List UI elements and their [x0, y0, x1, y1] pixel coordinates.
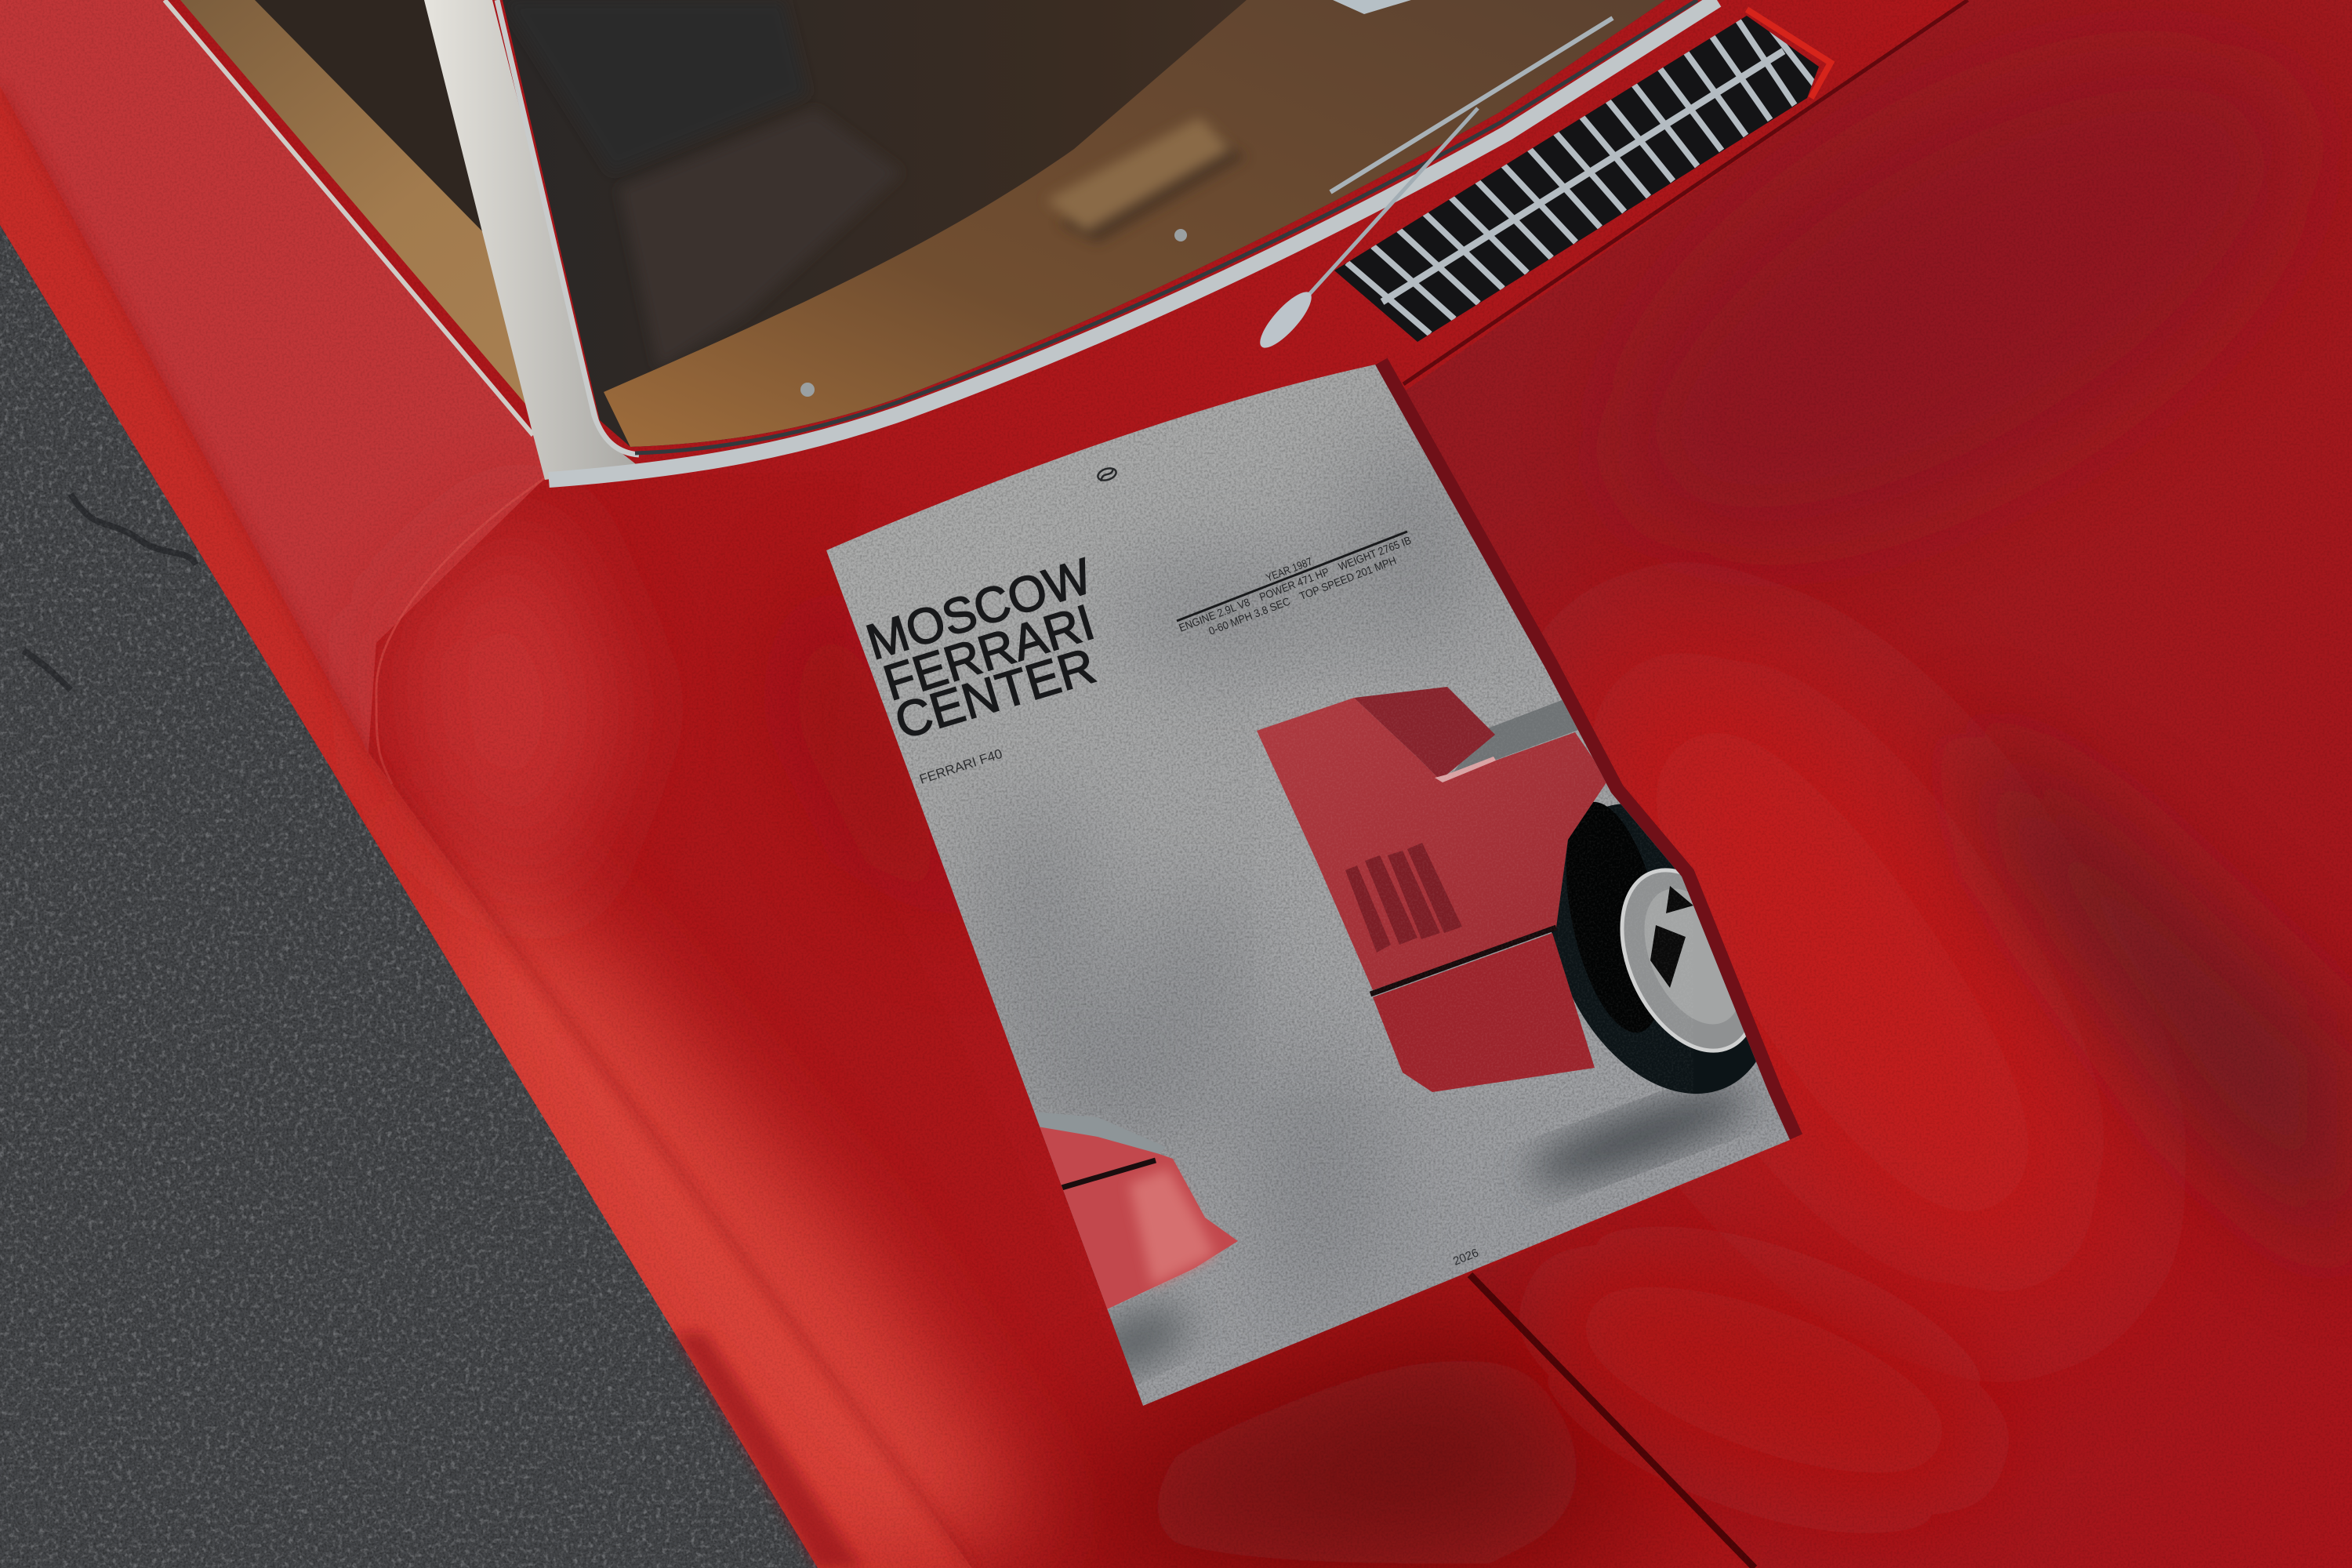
wiper	[1253, 18, 1613, 354]
dark fender edge at road	[674, 1333, 862, 1568]
car wheel shadow	[1520, 1076, 1757, 1198]
shade: dark lower maroon	[1019, 1333, 1662, 1564]
dark interior in side window	[255, 0, 486, 235]
a-pillar	[424, 0, 639, 480]
wheel arch and tire	[1505, 767, 1819, 1131]
side window chrome edge	[165, 0, 533, 435]
rear bumper	[1373, 933, 1595, 1092]
bumper gap	[1370, 927, 1556, 994]
body highlight	[1435, 757, 1496, 782]
cowl seam	[1403, 0, 1968, 384]
front nose	[1019, 1123, 1238, 1333]
highlight: bright fender reflection	[439, 792, 1051, 1560]
poster title: CENTER	[888, 637, 1102, 750]
wheel upper spoke gap	[1666, 886, 1693, 913]
car front shadow	[1076, 1294, 1197, 1387]
highlight: hood red band	[1461, 535, 2224, 1410]
poster title: FERRARI	[877, 593, 1101, 711]
shade: hood dark band	[1960, 721, 2352, 1270]
windshield inner chrome	[497, 0, 639, 455]
arch shadow	[1548, 793, 1682, 1041]
dashboard box	[1047, 118, 1231, 231]
side vents	[1345, 843, 1462, 953]
windshield	[503, 0, 1665, 447]
body crease lines	[376, 478, 545, 784]
poster shadow edge	[1380, 362, 1795, 1138]
highlight: front fender glow	[392, 502, 627, 902]
poster specs: YEAR 1987	[1264, 555, 1314, 584]
hood seam	[1470, 1275, 1755, 1568]
rear body upper	[1257, 698, 1608, 990]
seat back	[503, 0, 808, 172]
dashboard	[604, 0, 1665, 447]
dashboard box shadow	[1058, 137, 1247, 243]
side window	[180, 0, 525, 404]
highlight: lower hood	[1508, 1203, 2020, 1556]
f40 rear photo	[1254, 682, 1819, 1131]
windshield chrome trim	[549, 0, 1717, 480]
rear glass	[1450, 698, 1592, 776]
front nose highlight	[1129, 1168, 1215, 1286]
poster	[784, 345, 1819, 1427]
rivets	[1174, 229, 1187, 241]
poster year: 2026	[1451, 1246, 1480, 1269]
front glass	[1033, 1112, 1166, 1160]
spec rule	[1177, 532, 1407, 621]
poster logo	[1096, 466, 1118, 482]
chrome mount	[1333, 0, 1411, 14]
panel: lower fender	[368, 470, 1755, 1568]
f40 front photo	[1019, 1112, 1238, 1333]
shade: upper hood	[1548, 0, 2352, 636]
shade: poster cast shadow	[784, 550, 980, 941]
poster subtitle: FERRARI F40	[917, 746, 1004, 787]
poster title	[860, 547, 1102, 750]
road crack	[24, 494, 196, 690]
poster specs: 0-60 MPH 3.8 SEC TOP SPEED 201 MPH	[1207, 554, 1398, 637]
wheel hub spokes	[1650, 925, 1686, 988]
poster mottling	[980, 439, 1482, 1317]
poster title: MOSCOW	[860, 547, 1098, 670]
poster specs: ENGINE 2.9L V8 POWER 471 HP WEIGHT 2765 IB	[1177, 534, 1413, 634]
wheel rim	[1595, 848, 1784, 1073]
front gap	[1062, 1160, 1156, 1188]
seat cushion	[619, 110, 902, 368]
rear wing	[1354, 687, 1495, 780]
panel: upper fender	[0, 0, 545, 753]
photo grain	[1254, 682, 1693, 1098]
panel: main hood	[1403, 0, 2352, 1568]
panel: fender lower edge	[0, 86, 972, 1568]
cowl grille	[1334, 9, 1831, 342]
rim inner	[1624, 873, 1762, 1040]
asphalt road	[0, 220, 823, 1568]
